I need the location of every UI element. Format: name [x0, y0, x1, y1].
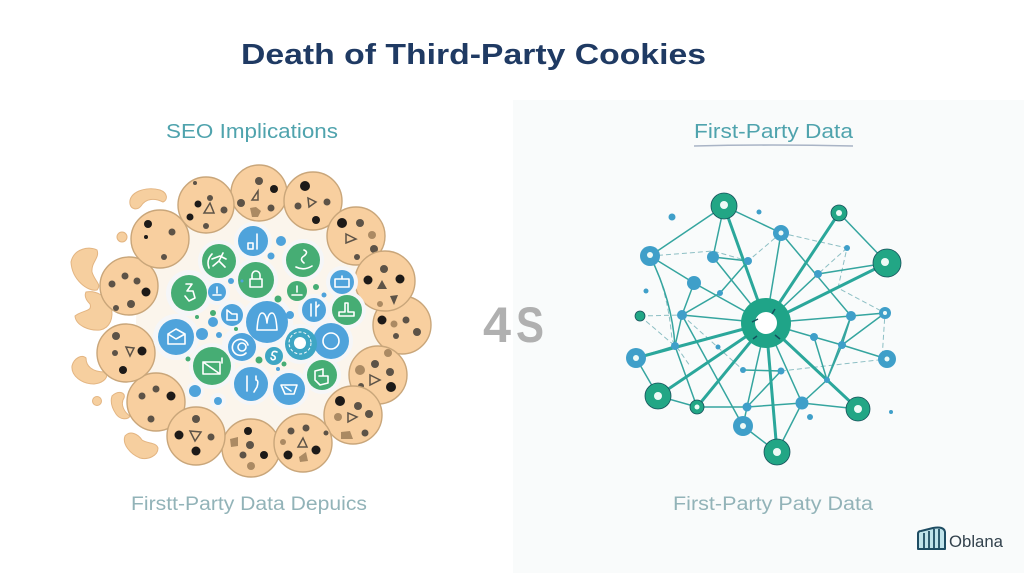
cookie 3 — [327, 207, 385, 265]
cookie 14 — [131, 210, 189, 268]
logo: Oblana — [918, 528, 1004, 551]
icon: runner — [202, 244, 236, 278]
icon: chart — [238, 226, 268, 256]
white bubble backing — [153, 222, 366, 409]
cream halo — [136, 196, 392, 448]
title: Death of Third-Party Cookies — [241, 39, 706, 71]
dashed links — [640, 233, 887, 403]
icon: photo — [193, 347, 231, 385]
cookie 5 — [373, 296, 431, 354]
logo: Oblana: Oblana — [949, 532, 1004, 551]
cookie 6 — [349, 346, 407, 404]
cookie 12 — [97, 324, 155, 382]
icon: cloud — [285, 328, 317, 360]
icon: basket — [273, 373, 305, 405]
center label: 4S: 4 — [483, 297, 511, 353]
caption: right: First-Party Paty Data — [673, 494, 873, 515]
blue nodes — [626, 210, 896, 436]
cookie 4 — [355, 251, 415, 311]
cookie 10 — [167, 407, 225, 465]
panel: first-party data background — [513, 100, 1024, 573]
caption: left: Firstt-Party Data Depuics — [131, 494, 367, 515]
icon: people — [171, 275, 207, 311]
cookie ring illustration — [71, 165, 431, 477]
icon: arches — [246, 301, 288, 343]
icon: stamp — [332, 295, 362, 325]
icon: ampersand — [265, 347, 283, 365]
icon: pin — [208, 283, 226, 301]
network diagram — [626, 193, 901, 465]
cookie 2 — [284, 172, 342, 230]
scattered dots — [186, 236, 326, 405]
icon: cube — [307, 360, 337, 390]
cookie 15 — [178, 177, 234, 233]
icon: digit — [234, 367, 268, 401]
cookie 13 — [100, 257, 158, 315]
heading: first-party data: First-Party Data — [694, 121, 854, 143]
center label: 4S — [483, 297, 544, 353]
icon: bars — [302, 298, 326, 322]
cookie 9 — [222, 419, 280, 477]
center label: 4S: S — [516, 297, 544, 353]
icon: padlock — [238, 262, 274, 298]
heading: SEO implications: SEO Implications — [166, 121, 338, 143]
green nodes — [635, 193, 901, 465]
icon: window — [330, 270, 354, 294]
icon: envelope — [158, 319, 194, 355]
icon: at sign — [228, 333, 256, 361]
cookie 7 — [324, 386, 382, 444]
hub node — [741, 298, 791, 348]
broken cookie crumbs — [71, 189, 166, 459]
icon: microscope — [286, 243, 320, 277]
cookie 1 — [231, 165, 287, 221]
cookie 11 — [127, 373, 185, 431]
icon: refresh — [313, 323, 349, 359]
cookie 8 — [274, 414, 332, 472]
thick links — [636, 206, 887, 452]
icon: chart box — [221, 304, 243, 326]
thin links — [636, 206, 887, 452]
icon: marker — [287, 281, 307, 301]
central icon cluster — [153, 222, 366, 409]
